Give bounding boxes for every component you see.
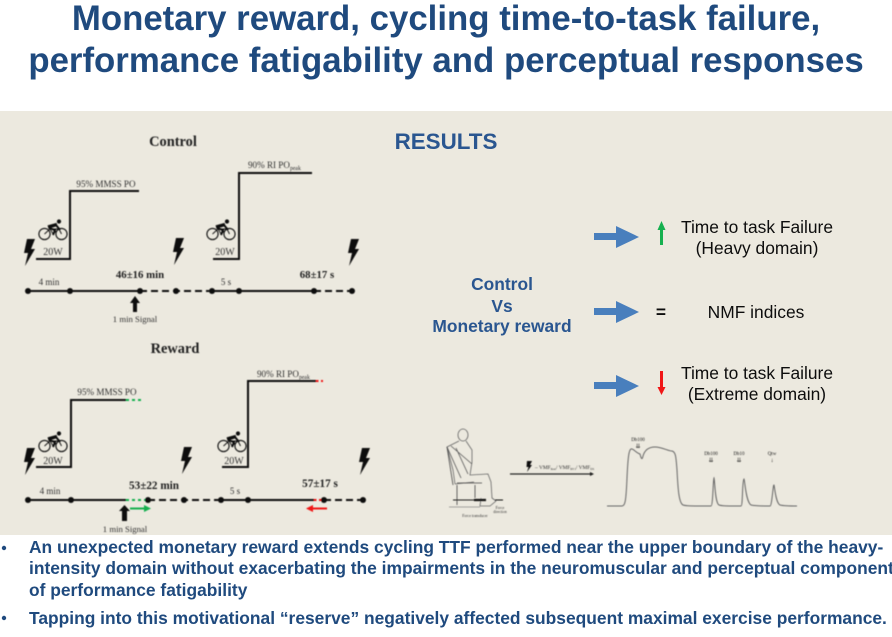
timeline labels: 1 min Signal <box>113 314 158 324</box>
label: 90% RI POpeak: peak <box>290 166 301 172</box>
text: (Extreme domain) <box>688 384 826 404</box>
title: performance fatigability and perceptual responses <box>28 41 864 80</box>
label: 90% RI POpeak: 90% RI PO <box>248 160 290 170</box>
text: (Heavy domain) <box>696 238 818 258</box>
label: force direction: Force <box>496 506 505 510</box>
bullet: first conclusion: intensity domain without exacerbating the impairments in the neuromuscular and perceptual components <box>29 558 892 578</box>
icon: stimulation bolts <box>24 447 370 475</box>
panel: neuromuscular fatigue measurement <box>447 429 797 518</box>
label: 95% MMSS PO: 95% MMSS PO <box>76 179 136 189</box>
timeline labels: 57±17 s <box>302 478 338 490</box>
labels: 20W <box>43 456 244 467</box>
power step: 95% MMSS PO <box>36 191 139 259</box>
label: VMF: / VMF <box>556 465 570 471</box>
icon: stimulation bolt small <box>526 461 532 472</box>
power step: 90% RI POpeak shortened <box>222 381 323 467</box>
label: 90% RI POpeak: 90% RI PO <box>257 369 299 379</box>
timeline labels: 1 min Signal <box>103 524 148 534</box>
chart labels: ↓ <box>770 458 774 464</box>
chart labels: ⇊ <box>708 457 714 464</box>
labels: 20W: 20W <box>43 247 63 258</box>
heading: Control: Control <box>149 134 197 150</box>
timeline <box>25 288 355 294</box>
timeline labels: 53±22 min <box>129 480 180 492</box>
chart labels <box>631 438 777 464</box>
finding: NMF indices <box>594 301 805 323</box>
chart labels: Db100 <box>631 438 645 443</box>
timeline labels: 68±17 s <box>300 269 334 281</box>
text: NMF indices <box>708 302 805 322</box>
equals sign: = <box>656 302 666 322</box>
text: control vs monetary reward: Vs <box>491 296 513 316</box>
arrow: blue <box>594 375 639 397</box>
label: VMF: – VMF <box>535 465 551 471</box>
text <box>681 217 833 258</box>
bullet: second conclusion: Tapping into this motivational “reserve” negatively affected subsequent maximal exercise performance. <box>29 608 887 628</box>
bullet: first conclusion: An unexpected monetary reward extends cycling TTF performed near the upper boundary of the heavy- <box>29 537 883 557</box>
label: 90% RI POpeak: peak <box>299 375 310 381</box>
panel: reward protocol diagram <box>24 341 370 534</box>
heading: Reward: Reward <box>151 341 199 357</box>
chart labels: ⇊ <box>635 443 641 450</box>
timeline labels: 46±16 min <box>116 269 164 281</box>
text: Time to task Failure <box>681 217 833 237</box>
finding: time to task failure extreme domain <box>594 363 833 404</box>
icon: stimulation bolts <box>24 238 359 266</box>
timeline labels <box>40 478 338 534</box>
icon: cyclist 2 <box>207 219 235 240</box>
panel: results background <box>0 111 892 535</box>
panel: control protocol diagram <box>24 134 359 324</box>
power step: 95% MMSS PO extended <box>36 400 144 467</box>
timeline labels <box>39 269 334 324</box>
arrow: green up <box>658 221 666 245</box>
label: VMF: RV1 <box>570 467 576 471</box>
chart labels: ⇊ <box>736 457 742 464</box>
labels: 20W: 20W <box>224 456 244 467</box>
label: VMF: Rest <box>551 467 556 471</box>
icon: cyclist 1 <box>39 431 67 452</box>
text: Time to task Failure <box>681 363 833 383</box>
label: 95% MMSS PO: 95% MMSS PO <box>77 387 137 397</box>
timeline labels: 4 min <box>39 277 60 287</box>
timeline labels: 5 s <box>221 277 232 287</box>
timeline labels: 4 min <box>40 486 61 496</box>
chart labels: Qtw <box>768 452 777 457</box>
arrow: 1 min signal <box>119 505 130 521</box>
icon: cyclist 1 <box>39 219 67 240</box>
title <box>28 0 864 80</box>
power step: 90% RI POpeak <box>213 173 312 259</box>
bullet: first conclusion: of performance fatigability <box>29 580 248 600</box>
arrow: blue <box>594 301 639 323</box>
label: VMF: DS <box>590 467 594 471</box>
label: VMF: / VMF <box>576 465 590 471</box>
text: control vs monetary reward: Monetary reward <box>432 316 572 336</box>
arrow: red reduced time <box>306 505 327 512</box>
arrow: green extended time <box>130 505 151 512</box>
labels: 20W: 20W <box>215 247 235 258</box>
illustration: seated participant <box>447 429 503 507</box>
text: control vs monetary reward: Control <box>471 274 533 294</box>
timeline <box>25 497 366 503</box>
heading: results: RESULTS <box>395 129 497 154</box>
timeline labels: 5 s <box>230 486 241 496</box>
label: force direction <box>462 506 507 518</box>
arrow: stimulation to force trace <box>510 473 592 475</box>
labels: 20W: 20W <box>43 456 63 467</box>
arrow: 1 min signal <box>130 296 140 312</box>
finding: time to task failure heavy domain <box>594 217 833 258</box>
text <box>681 363 833 404</box>
arrow: blue <box>594 226 639 248</box>
label: force direction: Force transducer <box>462 514 488 518</box>
chart: force trace <box>607 447 797 506</box>
arrow: red down <box>658 371 666 395</box>
chart labels: Db10 <box>733 452 745 457</box>
icon: cyclist 2 <box>218 431 246 452</box>
labels: 20W <box>43 247 235 258</box>
chart labels: Db100 <box>704 452 718 457</box>
text: control vs monetary reward <box>432 274 572 336</box>
bullet: first conclusion <box>2 537 892 600</box>
label: force direction: direction <box>493 510 507 514</box>
title: Monetary reward, cycling time-to-task failure, <box>72 0 820 38</box>
